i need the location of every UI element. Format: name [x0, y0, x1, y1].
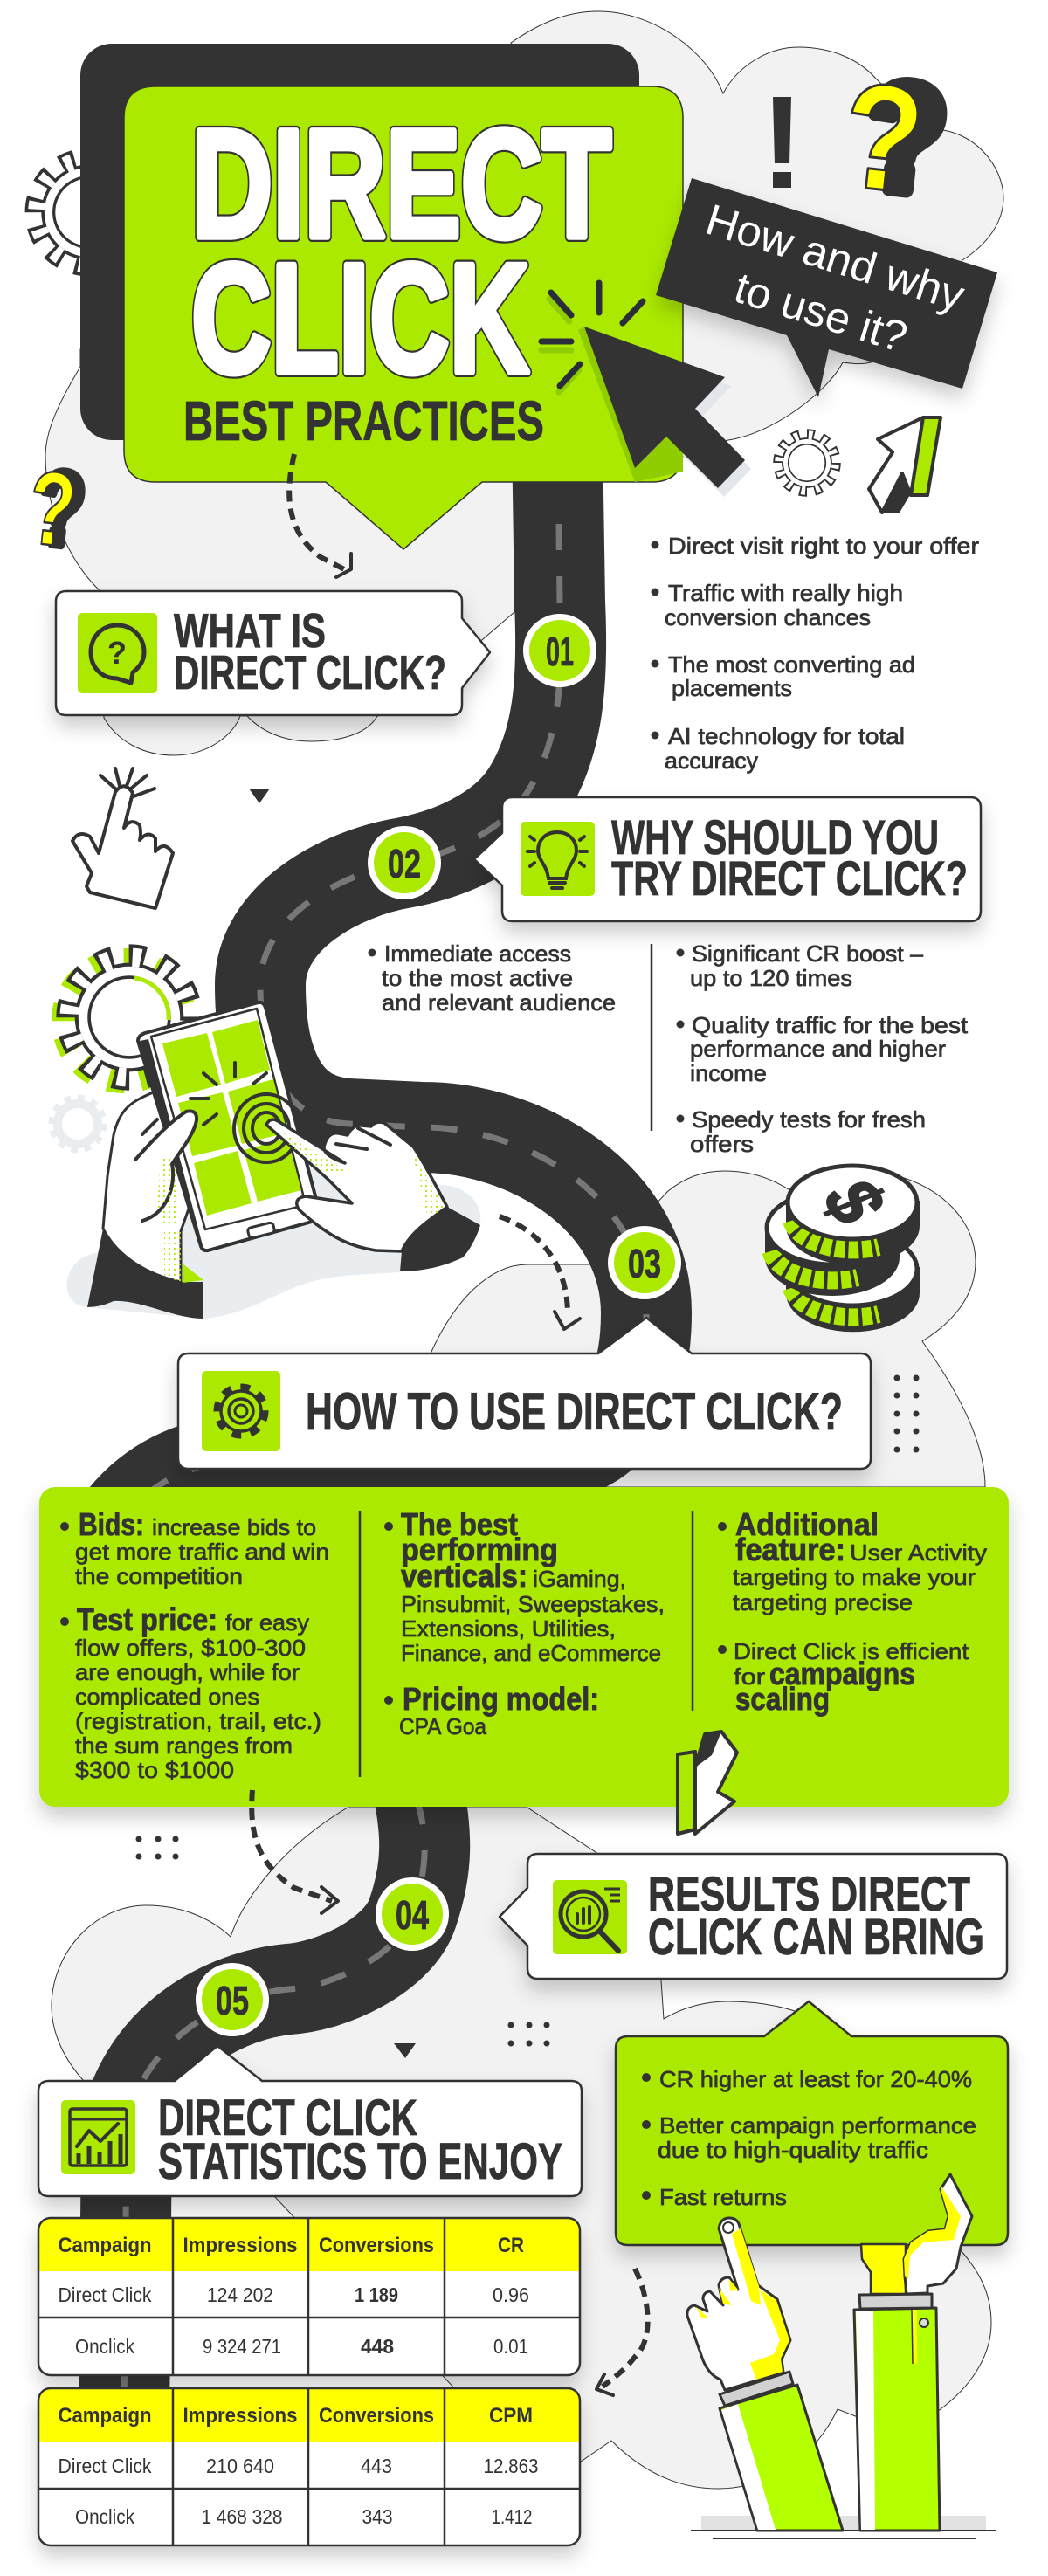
icon: exclamation mark [773, 97, 791, 188]
panel: how to use [178, 1318, 871, 1469]
heading [174, 603, 446, 699]
column: bids and test price: the competition [75, 1563, 243, 1589]
icon: question bubble: ? [107, 635, 127, 671]
icon: light bulb [521, 822, 595, 896]
text block: reasons to try [676, 940, 969, 1157]
column: verticals and pricing: Extensions, Utilities, [401, 1615, 616, 1642]
background cloud: top right [511, 11, 1003, 454]
table: CR statistics: 1 189 [355, 2283, 398, 2306]
road: upper winding section [96, 437, 646, 1563]
road: lower winding section [124, 1781, 424, 2428]
icon: gear left of the title [37, 160, 141, 265]
illustration: right arm raised [854, 2174, 972, 2531]
column: additional feature [718, 1506, 987, 1717]
decorative dots: center [508, 2022, 550, 2047]
text block: audience: Immediate access [384, 940, 571, 967]
text block: benefits list: placements [672, 675, 792, 701]
icon: tapping hand [72, 768, 173, 908]
panel: what is direct click [56, 591, 490, 715]
text block: reasons to try: Speedy tests for fresh [692, 1106, 926, 1133]
text block: reasons to try: offers [690, 1131, 754, 1157]
column: bids and test price: get more traffic and win [75, 1539, 329, 1565]
column: verticals and pricing: performing [401, 1532, 558, 1567]
callout: how and why [656, 178, 997, 397]
dashed arrow: to how to use [500, 1216, 580, 1329]
left sleeve [87, 1229, 203, 1319]
badge 03 [608, 1226, 681, 1299]
column: verticals and pricing: Pinsubmit, Sweepstakes, [401, 1591, 665, 1617]
table: CPM statistics: 1.412 [491, 2505, 533, 2528]
title: DIRECT: DIRECT [191, 99, 611, 270]
icon: question bubble [78, 613, 157, 693]
heading [158, 2090, 562, 2190]
panel: statistics to enjoy [38, 2046, 582, 2196]
column: bids and test price: (registration, trail, etc.) [75, 1708, 321, 1734]
badge 04 [376, 1877, 449, 1951]
table: CPM statistics: Conversions [319, 2404, 434, 2428]
icon: magnifier chart [553, 1880, 627, 1954]
background cloud: left [45, 349, 514, 755]
illustration: hands holding tablet [67, 1002, 480, 1319]
panel: results direct click can bring [500, 1854, 1007, 1979]
table: CR statistics: Campaign [58, 2234, 152, 2257]
dashed arrow: title to what is [289, 454, 351, 577]
table: CR statistics: Direct Click [58, 2283, 152, 2306]
table: CPM statistics: Impressions [183, 2404, 297, 2428]
left thumb [135, 1111, 196, 1221]
subtitle: BEST PRACTICES [183, 389, 544, 452]
table: CPM statistics: 1 468 328 [201, 2505, 283, 2528]
table: CR statistics: 448 [361, 2335, 394, 2358]
table: CR statistics: 124 202 [207, 2283, 273, 2306]
panel: results list: Better campaign performance [659, 2112, 976, 2139]
column: additional feature: campaigns [769, 1656, 915, 1691]
column: verticals and pricing: CPA Goa [399, 1713, 487, 1739]
column: additional feature: User Activity [850, 1539, 987, 1566]
column: verticals and pricing: iGaming, [533, 1566, 626, 1592]
table: CPM statistics: 443 [361, 2455, 392, 2477]
column: bids and test price [60, 1506, 329, 1783]
title: CLICK: CLICK [191, 231, 529, 405]
column: additional feature: targeting precise [733, 1589, 913, 1615]
left hand [103, 1083, 205, 1282]
badge 02: 02 [388, 841, 421, 886]
tablet [138, 1002, 321, 1250]
column: verticals and pricing: Finance, and eCommerce [401, 1640, 661, 1666]
icon: yellow question mark: ? [858, 50, 954, 225]
table: CR statistics: Conversions [319, 2234, 434, 2257]
badge 03: 03 [628, 1241, 661, 1286]
text block: benefits list: The most converting ad [668, 651, 915, 678]
table: CPM statistics [38, 2388, 580, 2545]
text block: benefits list: AI technology for total [668, 723, 905, 749]
heading: WHAT IS [174, 603, 326, 658]
heading [648, 1866, 984, 1966]
title backing card [80, 44, 639, 440]
column: bids and test price: are enough, while for [75, 1659, 300, 1685]
heading: HOW TO USE DIRECT CLICK? [306, 1382, 843, 1441]
table: CR statistics: 0.96 [493, 2283, 529, 2306]
icon: gear [202, 1371, 280, 1451]
table: CPM statistics: Onclick [75, 2505, 134, 2528]
text block: audience [369, 940, 616, 1016]
text block: reasons to try: performance and higher [690, 1036, 946, 1062]
icon: small question mark: ? [32, 449, 91, 570]
text block: reasons to try: up to 120 times [690, 965, 852, 991]
background cloud: coins [431, 1171, 985, 1487]
table: CPM statistics: 12.863 [484, 2455, 538, 2477]
table: CR statistics: Impressions [183, 2234, 297, 2257]
column: bids and test price: for easy [225, 1609, 309, 1636]
title card [124, 86, 683, 549]
badge 05: 05 [216, 1978, 249, 2023]
icon: coin stack [767, 1166, 918, 1330]
text block: reasons to try: Quality traffic for the best [692, 1012, 969, 1038]
table: CR statistics [38, 2218, 580, 2375]
panel: results list: due to high-quality traffic [658, 2137, 928, 2163]
text block: benefits list [652, 533, 979, 774]
icon: up arrow [869, 417, 941, 513]
dashed arrow: to tables [596, 2269, 648, 2395]
title: DIRECT: DIRECT [191, 99, 611, 270]
badge 01: 01 [546, 629, 574, 674]
icon: browser analytics [61, 2100, 135, 2174]
table: CPM statistics: Direct Click [58, 2455, 152, 2477]
top coin: $ [804, 1170, 904, 1234]
heading [611, 809, 968, 906]
column: additional feature: for [734, 1663, 765, 1690]
table: CPM statistics: 343 [362, 2505, 393, 2528]
icon: small gear [779, 435, 835, 491]
text block: benefits list: accuracy [665, 747, 758, 774]
panel: why should you try [474, 797, 981, 921]
badge 05 [196, 1963, 269, 2036]
table: CR statistics: 0.01 [493, 2335, 528, 2358]
text block: audience: to the most active [382, 965, 573, 991]
badge 04: 04 [396, 1892, 429, 1938]
background cloud: bottom [52, 1808, 991, 2489]
panel: results list: CR higher at least for 20-40% [659, 2066, 972, 2092]
icon: cursor with click rays [541, 283, 751, 497]
icon: small triangle [394, 2043, 416, 2058]
panel: results list: Fast returns [659, 2184, 787, 2210]
callout: how and why: How and why [700, 195, 970, 320]
table: CPM statistics: Campaign [58, 2404, 152, 2428]
top coin [788, 1166, 918, 1263]
column: verticals and pricing: Pricing model: [403, 1681, 599, 1717]
illustration: left arm pointing [687, 2218, 843, 2531]
column: bids and test price: the sum ranges from [75, 1732, 293, 1759]
text block: benefits list: conversion chances [665, 604, 871, 630]
table: CPM statistics: 210 640 [206, 2455, 274, 2477]
column: additional feature: Direct Click is efficient [734, 1638, 969, 1664]
panel: results list [616, 2001, 1008, 2245]
table: CR statistics: 9 324 271 [203, 2335, 281, 2358]
column: bids and test price: Test price: [77, 1601, 217, 1637]
column: verticals and pricing [384, 1506, 665, 1739]
text block: reasons to try: Significant CR boost – [692, 940, 924, 967]
heading: DIRECT CLICK [158, 2090, 417, 2146]
title: CLICK: CLICK [191, 231, 529, 405]
table: CR statistics: Onclick [75, 2335, 134, 2358]
icon: small question mark: ? [23, 449, 81, 570]
heading: STATISTICS TO ENJOY [158, 2133, 562, 2190]
column: additional feature: feature: [735, 1532, 845, 1567]
column: bids and test price: flow offers, $100-300 [75, 1635, 306, 1661]
panel: how to use details [39, 1487, 1009, 1807]
right hand [266, 1119, 447, 1251]
column: bids and test price: increase bids to [152, 1514, 316, 1540]
decorative dots: below panel [136, 1836, 178, 1860]
icon: large gear with green shadow [65, 957, 190, 1080]
icon: down arrow [678, 1732, 737, 1834]
text block: benefits list: Traffic with really high [668, 580, 903, 606]
icon: pale gear [53, 1099, 102, 1148]
column: bids and test price: $300 to $1000 [75, 1757, 234, 1783]
text block: benefits list: Direct visit right to your offer [668, 533, 979, 559]
blob behind hands [67, 1135, 480, 1319]
column: verticals and pricing: verticals: [401, 1558, 527, 1594]
table: CPM statistics: CPM [489, 2404, 533, 2428]
bottom coin [788, 1232, 918, 1330]
text block: audience: and relevant audience [382, 989, 616, 1016]
table: CR statistics: CR [498, 2234, 524, 2257]
dashed arrow: to results [252, 1790, 338, 1913]
heading: DIRECT CLICK? [174, 645, 446, 699]
column: bids and test price: Bids: [79, 1506, 144, 1542]
column: additional feature: scaling [735, 1681, 830, 1717]
middle coin [767, 1191, 898, 1294]
callout: how and why: to use it? [729, 263, 913, 362]
column: additional feature: targeting to make your [733, 1564, 976, 1590]
icon: small triangle [249, 789, 270, 803]
icon: yellow question mark: ? [835, 50, 931, 225]
badge 01 [523, 614, 596, 687]
column: bids and test price: complicated ones [75, 1684, 259, 1710]
decorative dots: right of how to use [894, 1374, 919, 1453]
column: additional feature: Additional [735, 1506, 879, 1542]
badge 02 [368, 826, 441, 899]
column: verticals and pricing: The best [401, 1506, 518, 1542]
text block: reasons to try: income [690, 1060, 767, 1086]
right sleeve [400, 1207, 480, 1271]
illustration: ground [691, 2516, 996, 2538]
